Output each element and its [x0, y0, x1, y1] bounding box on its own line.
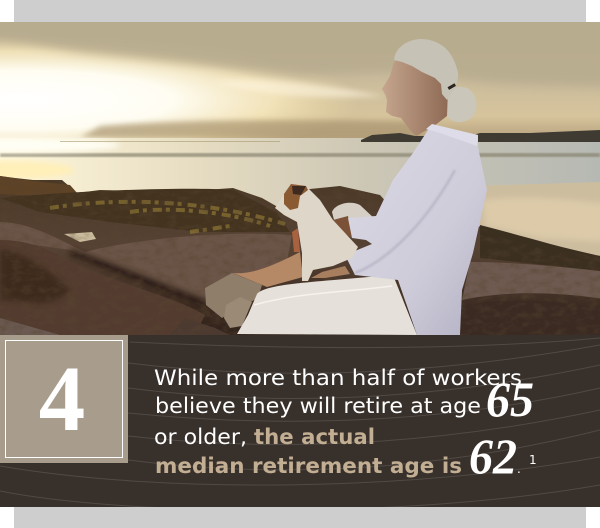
leg	[233, 252, 303, 287]
statement text: 62	[469, 428, 517, 484]
wet sand	[479, 182, 600, 256]
statement text: While more than half of workers	[154, 366, 522, 391]
sea	[0, 136, 600, 206]
distant headland	[361, 130, 600, 142]
statement text: .	[517, 462, 521, 476]
hair	[394, 39, 458, 100]
statement text	[154, 366, 537, 484]
ponytail	[445, 87, 476, 122]
photo: woman and dog on the beach at sunset	[0, 10, 600, 336]
caption band	[0, 335, 600, 510]
raised knee	[332, 202, 372, 220]
number badge	[0, 335, 128, 463]
statement text: median retirement age is	[155, 454, 462, 479]
neck and face	[382, 60, 448, 136]
woman	[292, 39, 487, 335]
statement text: believe they will retire at age	[155, 394, 481, 419]
bottom grey bar	[14, 507, 586, 528]
rocks	[0, 176, 600, 336]
hand behind dog	[292, 228, 300, 252]
hand	[311, 266, 350, 278]
top grey bar	[14, 0, 586, 22]
statement text: or older,	[154, 425, 247, 450]
numeral 4: 4	[39, 348, 85, 451]
trousers	[237, 275, 417, 335]
shirt	[345, 127, 487, 335]
statement text: the actual	[254, 425, 375, 450]
sky	[0, 22, 600, 138]
foot rocks	[205, 273, 262, 328]
dog	[275, 184, 358, 281]
trouser crease	[254, 286, 392, 305]
statement text: 1	[529, 453, 537, 467]
hair tie	[448, 83, 456, 90]
sleeve fold	[355, 170, 455, 273]
statement text: 65	[486, 371, 534, 427]
collar	[426, 124, 478, 146]
forearm behind dog	[333, 216, 352, 238]
